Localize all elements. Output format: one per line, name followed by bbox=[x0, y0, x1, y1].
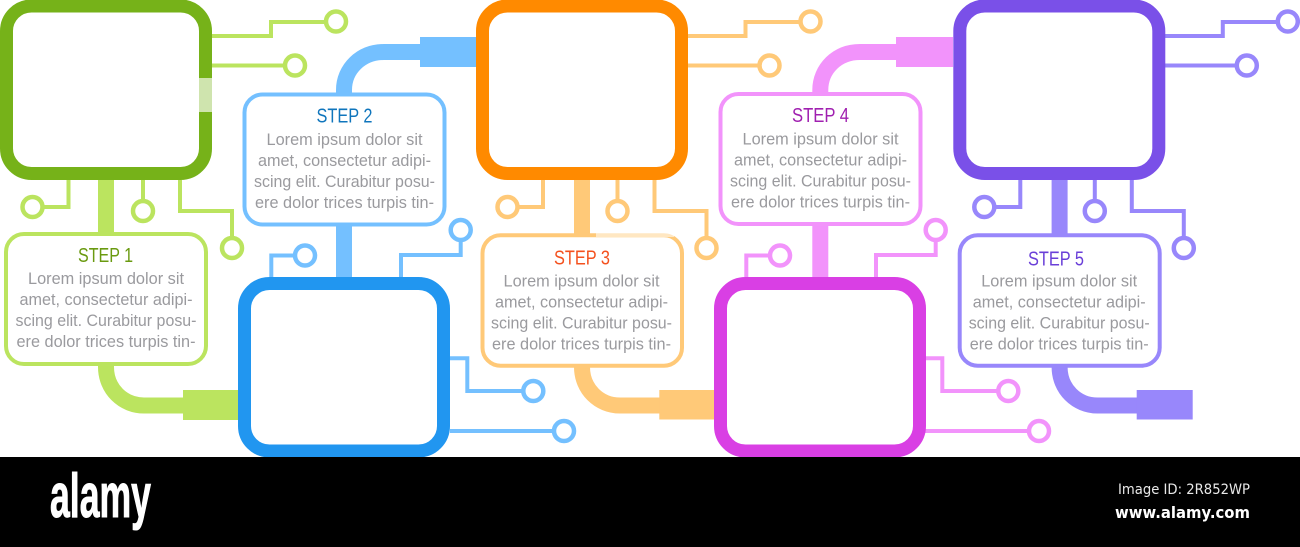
text panel: step 3 bbox=[482, 235, 682, 366]
text block: step 4: scing elit. Curabitur posu- bbox=[730, 172, 911, 190]
text panel: step 5 bbox=[960, 235, 1160, 366]
text block: step 5 bbox=[969, 272, 1150, 354]
connectors: step 3 orange bbox=[498, 12, 820, 420]
square panel: step 4 image frame bbox=[720, 284, 920, 451]
text block: step 4: amet, consectetur adipi- bbox=[734, 152, 907, 170]
footer bar bbox=[0, 457, 1300, 547]
connectors: step 1 green bbox=[22, 12, 346, 420]
connectors: step 4 magenta bbox=[746, 37, 1049, 441]
logo: alamy: alamy bbox=[50, 462, 151, 531]
text block: step 3: amet, consectetur adipi- bbox=[495, 294, 668, 312]
text block: step 2 bbox=[254, 131, 435, 212]
heading: step 4: STEP 4 bbox=[792, 105, 849, 127]
text block: step 3: ere dolor trices turpis tin- bbox=[492, 336, 671, 354]
text panel: step 2 bbox=[244, 94, 444, 224]
image id: Image ID: 2R852WP bbox=[1118, 482, 1250, 498]
text panel: step 1 bbox=[6, 234, 206, 364]
text block: step 2: Lorem ipsum dolor sit bbox=[266, 131, 423, 149]
text block: step 4: Lorem ipsum dolor sit bbox=[742, 130, 899, 148]
text block: step 1: scing elit. Curabitur posu- bbox=[16, 312, 196, 330]
text block: step 3 bbox=[491, 272, 672, 354]
square panel: step 5 image frame bbox=[960, 6, 1159, 174]
text block: step 5: ere dolor trices turpis tin- bbox=[970, 336, 1149, 354]
text block: step 1 bbox=[16, 270, 196, 351]
text block: step 1: Lorem ipsum dolor sit bbox=[28, 270, 184, 288]
square panel: step 2 image frame bbox=[244, 284, 444, 451]
text block: step 5: scing elit. Curabitur posu- bbox=[969, 314, 1150, 332]
heading: step 2: STEP 2 bbox=[316, 106, 372, 128]
text block: step 2: ere dolor trices turpis tin- bbox=[255, 194, 434, 212]
text block: step 5: Lorem ipsum dolor sit bbox=[981, 272, 1138, 290]
square panel: step 3 image frame bbox=[482, 6, 682, 174]
connectors: step 2 blue bbox=[271, 37, 574, 441]
text block: step 1: amet, consectetur adipi- bbox=[20, 291, 192, 309]
text block: step 1: ere dolor trices turpis tin- bbox=[16, 333, 196, 351]
website: www.alamy.com bbox=[1115, 503, 1250, 522]
heading: step 5: STEP 5 bbox=[1028, 248, 1084, 270]
text block: step 3: Lorem ipsum dolor sit bbox=[504, 272, 660, 290]
connectors: step 5 purple bbox=[974, 12, 1298, 420]
text block: step 5: amet, consectetur adipi- bbox=[973, 294, 1146, 312]
text block: step 2: amet, consectetur adipi- bbox=[258, 152, 431, 170]
heading: step 1: STEP 1 bbox=[78, 245, 133, 267]
text block: step 4: ere dolor trices turpis tin- bbox=[731, 194, 910, 212]
text block: step 2: scing elit. Curabitur posu- bbox=[254, 173, 435, 191]
heading: step 3: STEP 3 bbox=[554, 247, 610, 269]
square panel: step 1 image frame bbox=[6, 6, 206, 174]
text panel: step 4 bbox=[720, 94, 920, 224]
text block: step 3: scing elit. Curabitur posu- bbox=[491, 314, 672, 332]
text block: step 4 bbox=[730, 130, 911, 212]
